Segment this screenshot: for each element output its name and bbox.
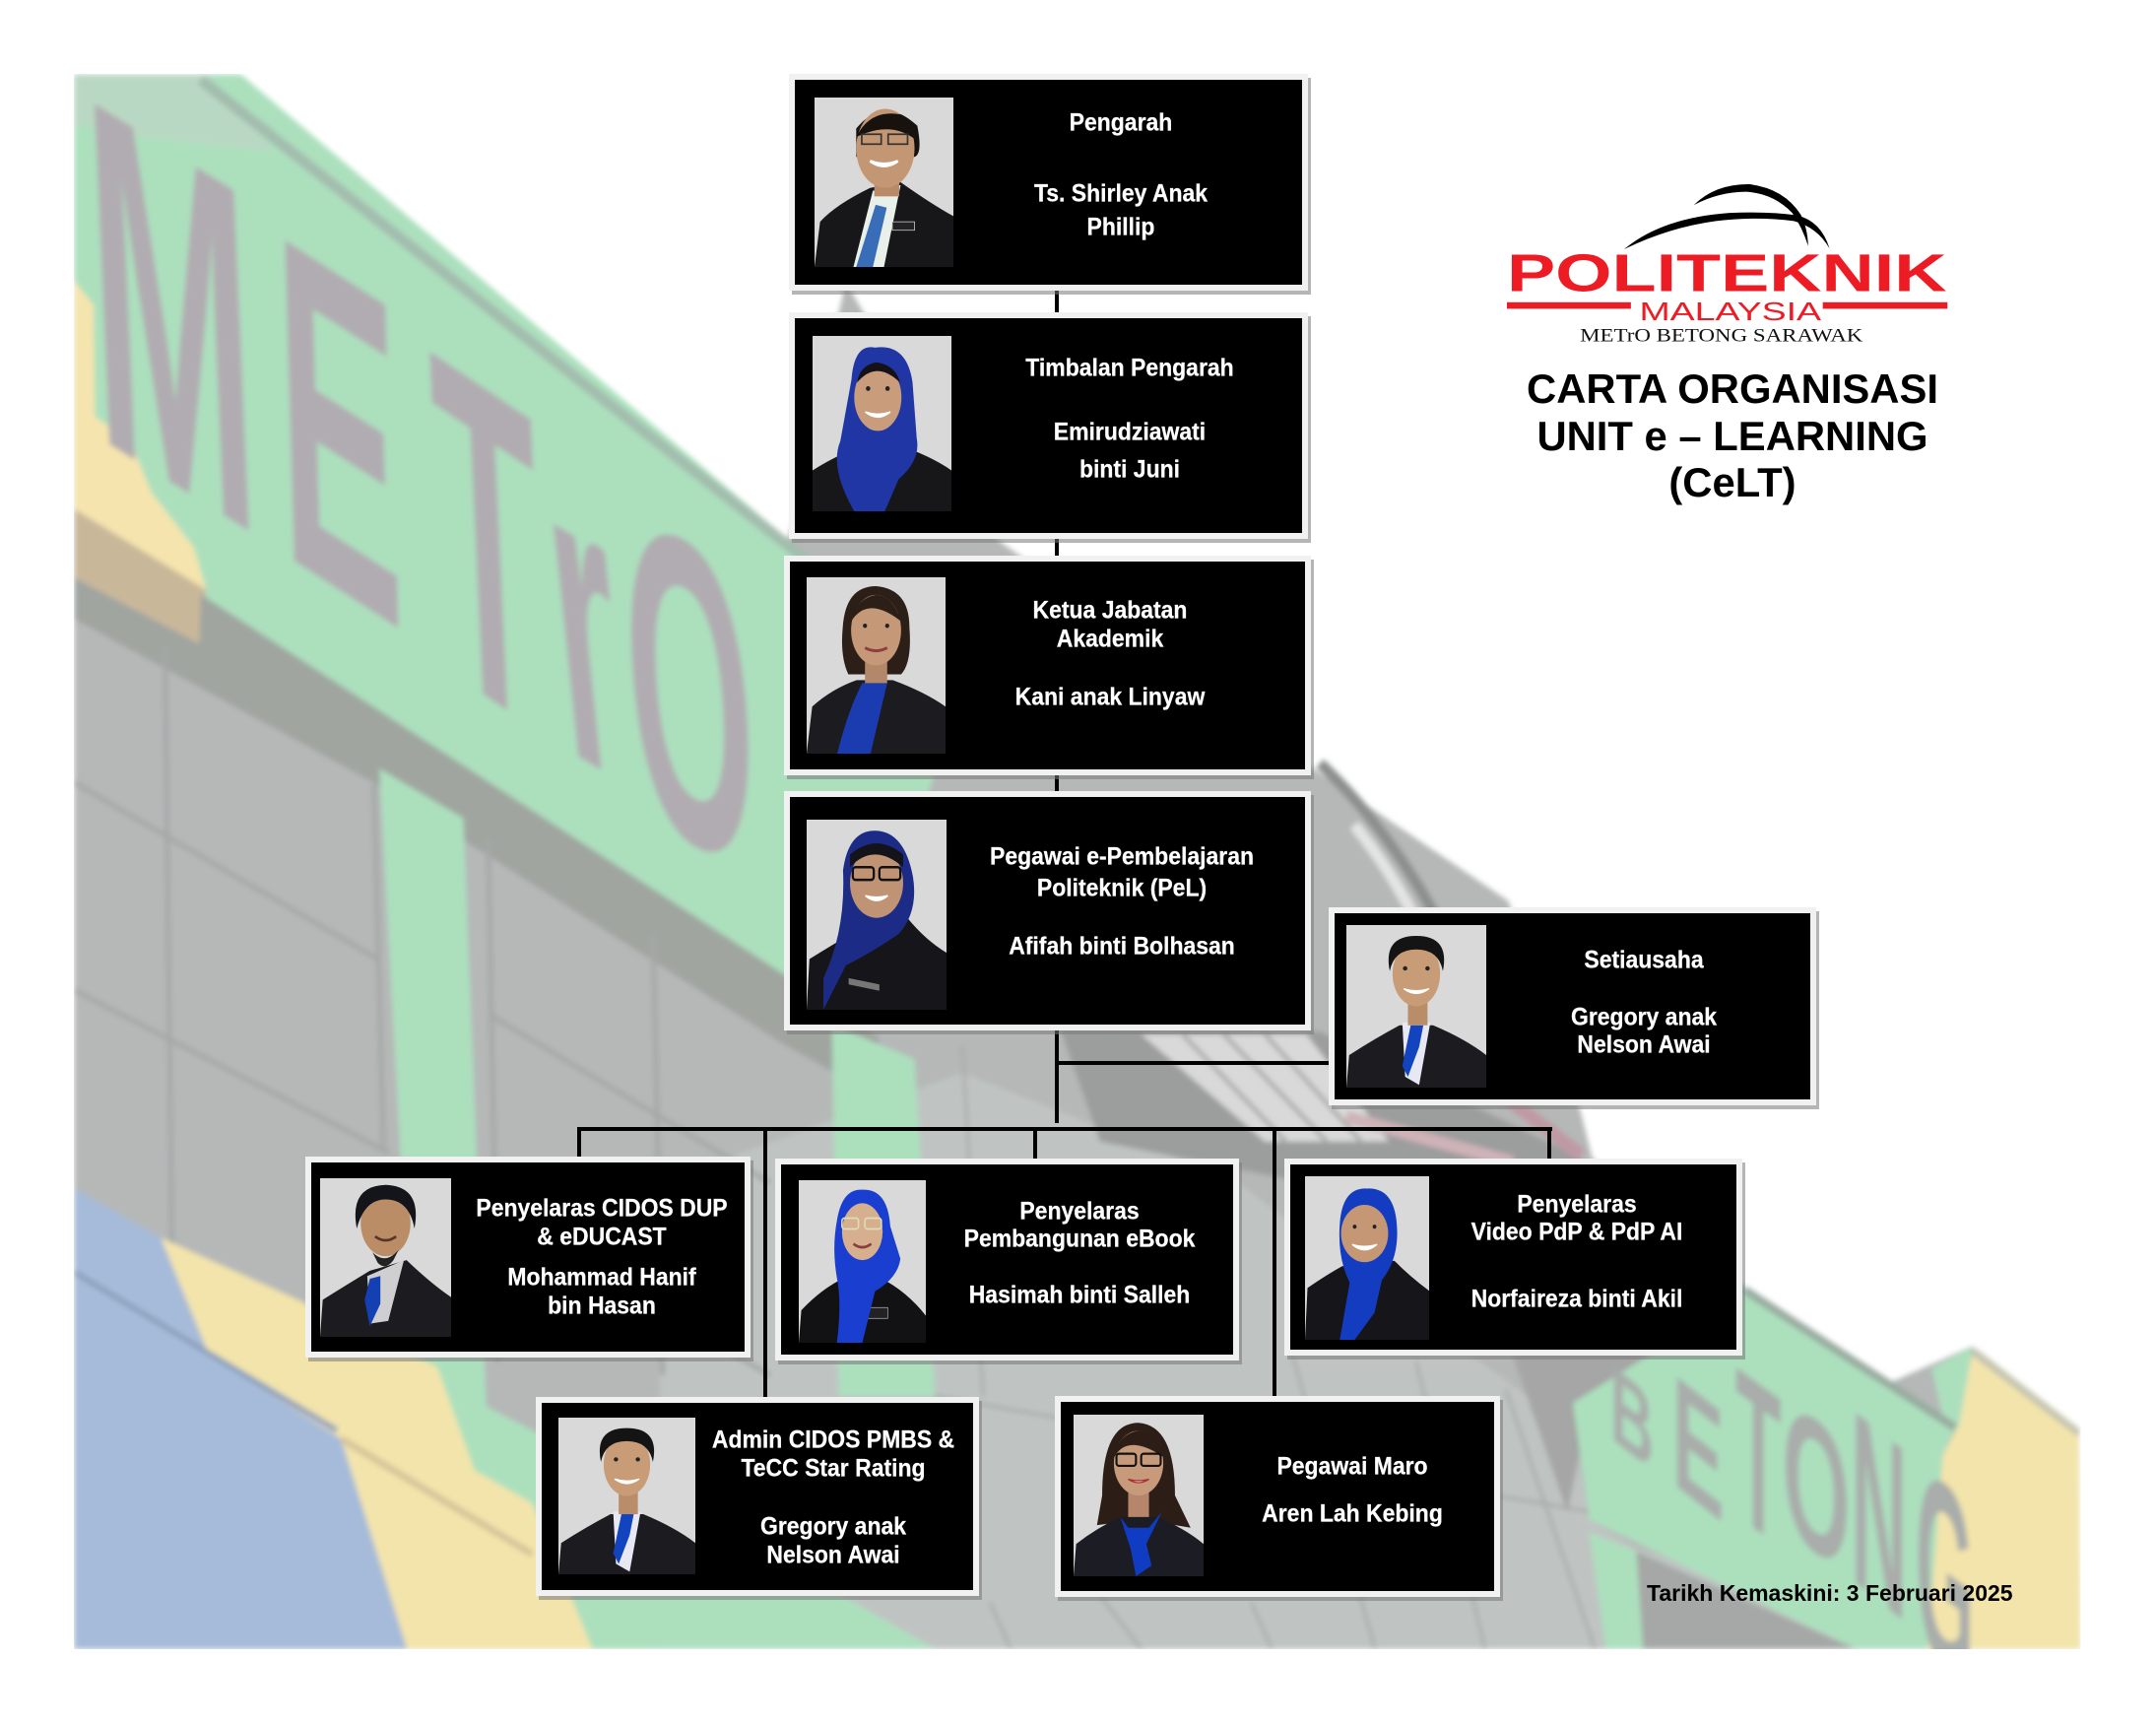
title: CARTA ORGANISASI <box>1527 365 1938 412</box>
panel: Ketua Jabatan Akademik <box>784 556 1311 775</box>
panel: Pegawai e-Pembelajaran Politeknik <box>784 791 1311 1030</box>
panel: Pengarah <box>789 74 1308 291</box>
role and name text: Penyelaras CIDOS DUP <box>476 1196 728 1223</box>
role and name text: Nelson Awai <box>766 1543 900 1569</box>
panel: Penyelaras Video PdP <box>1284 1159 1742 1356</box>
blurred building background photo: T <box>1735 1320 1782 1594</box>
role and name text: Timbalan Pengarah <box>1025 356 1234 382</box>
panel: Penyelaras Pembangunan eBook <box>775 1159 1239 1360</box>
role and name text: binti Juni <box>1079 457 1180 484</box>
role and name text: & eDUCAST <box>537 1225 667 1251</box>
role and name text: Pegawai e-Pembelajaran <box>990 844 1254 871</box>
role and name text: Pengarah <box>1070 110 1172 137</box>
title <box>1527 365 1938 505</box>
role and name text: Nelson Awai <box>1577 1032 1711 1059</box>
photo: Norfaireza <box>1305 1176 1429 1340</box>
role and name text <box>476 1196 728 1320</box>
role and name text: Setiausaha <box>1584 948 1704 974</box>
photo: Gregory <box>1346 925 1486 1088</box>
role and name text <box>1034 110 1208 241</box>
role and name text: bin Hasan <box>548 1294 656 1320</box>
role and name text: Kani anak Linyaw <box>1015 685 1205 711</box>
role and name text <box>1015 598 1206 711</box>
role and name text: Hasimah binti Salleh <box>969 1283 1190 1309</box>
title: (CeLT) <box>1668 459 1797 505</box>
photo: Emirudziawati <box>813 336 951 511</box>
role and name text: Mohammad Hanif <box>507 1265 696 1292</box>
blurred building background photo: M <box>77 0 267 645</box>
blurred building background photo: T <box>423 249 553 835</box>
role and name text: TeCC Star Rating <box>741 1456 926 1483</box>
role and name text: Gregory anak <box>1571 1005 1717 1031</box>
photo: Mohammad Hanif <box>320 1178 451 1337</box>
role and name text <box>1061 1402 1494 1591</box>
panel: Timbalan Pengarah <box>789 312 1308 539</box>
role and name text: Penyelaras <box>1019 1199 1140 1226</box>
role and name text: Aren Lah Kebing <box>1262 1501 1443 1528</box>
role and name text <box>1290 1164 1736 1350</box>
panel: Penyelaras CIDOS DUP <box>305 1157 751 1358</box>
role and name text: Gregory anak <box>760 1514 906 1541</box>
role and name text: Pegawai Maro <box>1276 1454 1428 1481</box>
panel: Admin CIDOS PMBS <box>536 1397 979 1596</box>
role and name text: Ketua Jabatan <box>1033 598 1187 625</box>
blurred building background photo: E <box>270 133 409 732</box>
role and name text <box>990 844 1254 961</box>
blurred building background photo: O <box>611 417 769 968</box>
role and name text: Pembangunan eBook <box>964 1227 1195 1253</box>
role and name text: Politeknik (PeL) <box>1037 876 1207 902</box>
logo: Politeknik Malaysia METrO Betong Sarawak: POLITEKNIK <box>1507 243 1947 302</box>
photo: Gregory <box>558 1418 695 1574</box>
role and name text: Norfaireza binti Akil <box>1471 1287 1682 1313</box>
photo: Kani <box>807 577 946 754</box>
logo: Politeknik Malaysia METrO Betong Sarawak: METrO BETONG SARAWAK <box>1580 326 1862 346</box>
role and name text <box>542 1403 973 1590</box>
role and name text: Penyelaras <box>1517 1192 1637 1219</box>
update date note: Tarikh Kemaskini: 3 Februari 2025 <box>1647 1580 2013 1606</box>
role and name text: Ts. Shirley Anak <box>1034 181 1208 208</box>
role and name text: Emirudziawati <box>1054 420 1206 446</box>
role and name text: Akademik <box>1057 627 1163 653</box>
blurred building background photo: E <box>1672 1339 1725 1559</box>
role and name text: Video PdP & PdP AI <box>1471 1220 1682 1246</box>
role and name text: Afifah binti Bolhasan <box>1009 934 1235 961</box>
role and name text: Phillip <box>1087 215 1154 241</box>
photo: Shirley <box>815 98 953 267</box>
panel: Setiausaha <box>1329 907 1816 1105</box>
role and name text <box>1025 356 1234 484</box>
role and name text: Admin CIDOS PMBS & <box>712 1427 954 1454</box>
role and name text <box>1571 948 1718 1059</box>
blurred building background photo: N <box>1851 1356 1908 1677</box>
blurred building background photo: O <box>1782 1358 1851 1618</box>
blurred building background photo: B <box>1610 1341 1654 1495</box>
title: UNIT e – LEARNING <box>1536 412 1928 459</box>
logo: Politeknik Malaysia METrO Betong Sarawak <box>1507 184 1948 346</box>
photo: Afifah <box>807 820 947 1010</box>
photo: Aren <box>1074 1415 1204 1576</box>
logo: Politeknik Malaysia METrO Betong Sarawak: MALAYSIA <box>1639 297 1822 326</box>
photo: Hasimah <box>799 1180 926 1343</box>
blurred building background photo: r <box>524 351 642 882</box>
role and name text <box>781 1164 1233 1355</box>
panel: Pegawai Maro <box>1055 1396 1500 1597</box>
